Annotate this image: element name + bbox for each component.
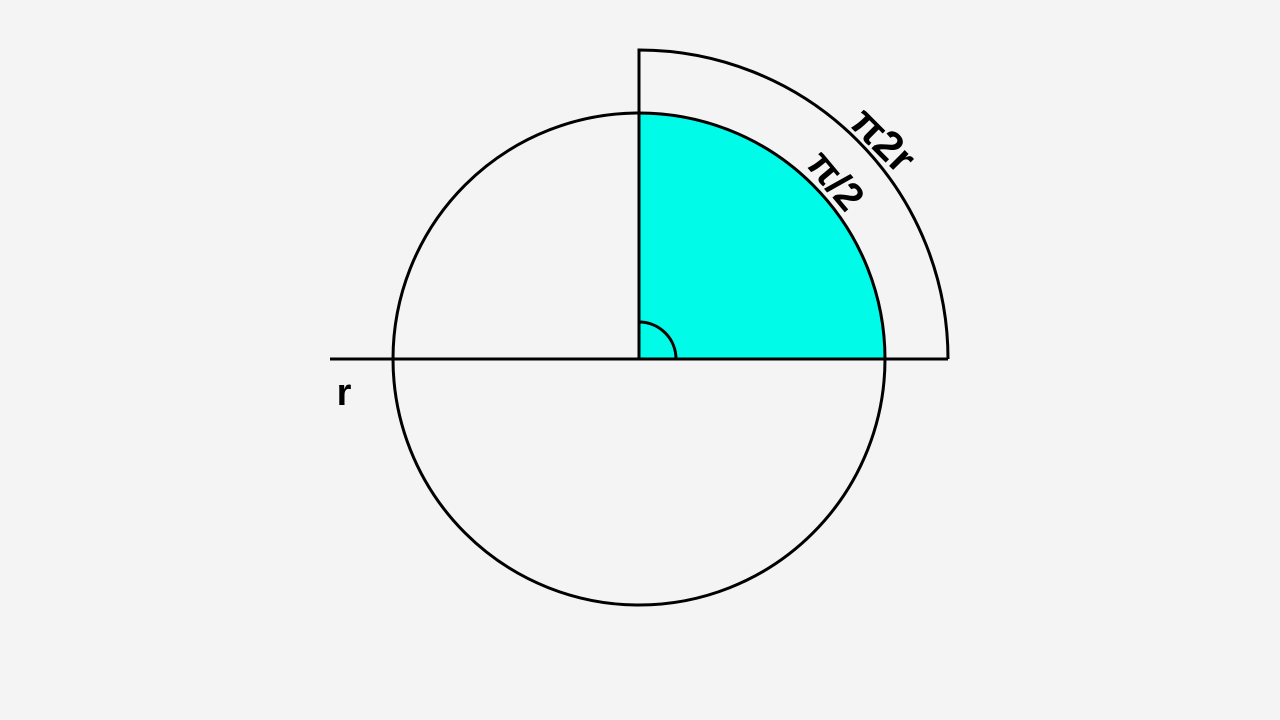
label: pi2r: π2r [841,98,925,182]
right angle mark [639,322,676,359]
outer quarter arc [639,50,948,359]
horizontal axis line [330,358,948,360]
label: r: r [337,372,352,414]
label: pi/2: π/2 [798,142,873,219]
shaded quarter sector [639,113,885,359]
circle [393,113,885,605]
